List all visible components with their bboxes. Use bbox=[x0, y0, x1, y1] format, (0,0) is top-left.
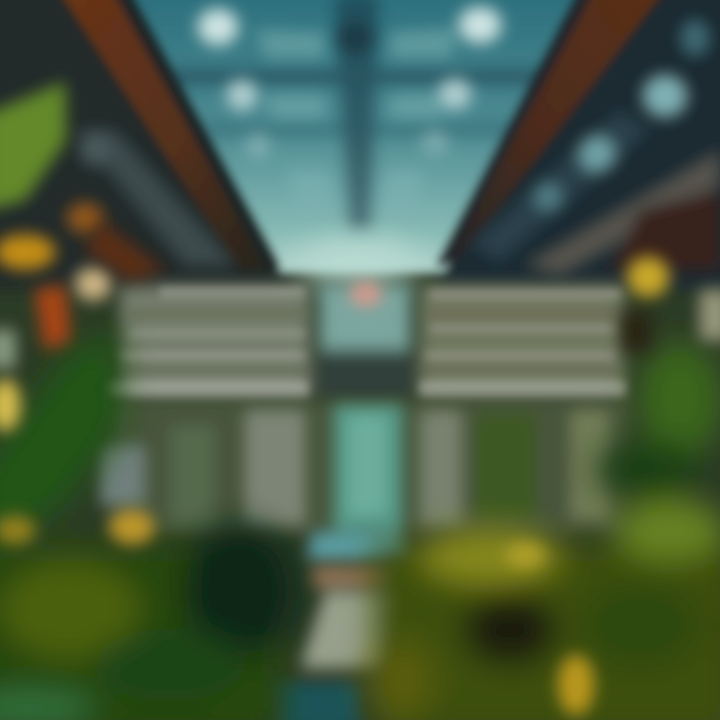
beam: right brown timber bbox=[436, 0, 665, 265]
accent: right edge pale wall bbox=[700, 290, 720, 340]
pillar: right dark post bbox=[620, 310, 652, 352]
plant: left orange and yellow blooms bbox=[0, 203, 165, 431]
mezzanine: grey balcony band bbox=[120, 285, 625, 400]
skylight lamps bbox=[198, 7, 501, 157]
foliage: right lower greenery bbox=[364, 342, 720, 720]
foliage: left lower greenery bbox=[0, 330, 296, 720]
column: central teal glass lift bbox=[306, 405, 408, 560]
foliage: yellow highlights bbox=[0, 510, 594, 715]
beam: left brown timber bbox=[58, 0, 280, 275]
floor: central walkway bbox=[275, 566, 405, 720]
lower hall: dark backdrop bbox=[110, 400, 630, 535]
lamp: yellow globe right bbox=[627, 257, 669, 297]
columns: lower hall pillars bbox=[100, 410, 610, 525]
accent: coral light at centre bbox=[350, 282, 382, 306]
skylight: teal glass roof bbox=[130, 0, 590, 284]
mezzanine: railing stripes bbox=[108, 288, 625, 396]
plant: upper left green leaf bbox=[0, 82, 66, 210]
left ceiling: grey slats bbox=[75, 130, 235, 265]
ceiling: dark side panels bbox=[0, 0, 720, 290]
right ceiling: lights and grey beam bbox=[470, 20, 720, 275]
